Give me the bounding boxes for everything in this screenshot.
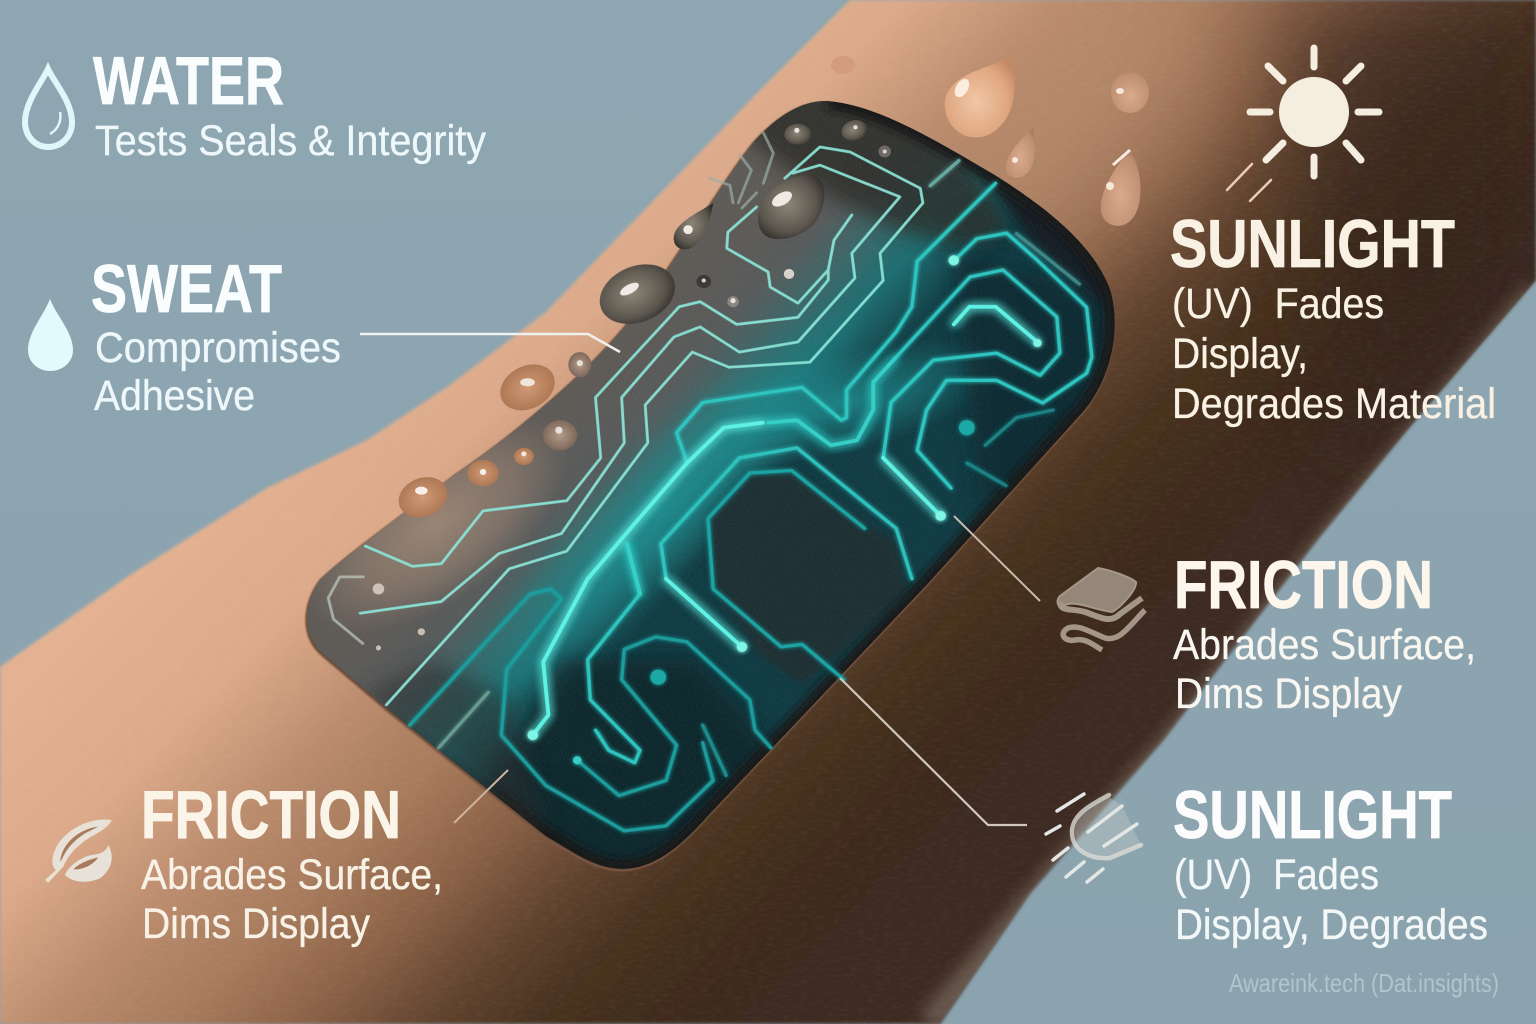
circuit nodes xyxy=(528,255,1042,764)
heading: friction right: FRICTION xyxy=(1174,547,1433,623)
text: friction right description: Abrades Surface, xyxy=(1173,621,1476,669)
text: friction left description xyxy=(141,851,443,948)
icon: friction leaves xyxy=(45,819,112,883)
heading: sunlight bottom: SUNLIGHT xyxy=(1173,777,1452,853)
text: sweat description: Compromises xyxy=(95,324,341,372)
heading: sweat: SWEAT xyxy=(91,251,282,327)
leader line: friction left xyxy=(454,770,508,823)
text: sunlight top description: Display, xyxy=(1172,330,1308,378)
text: sunlight top description xyxy=(1172,280,1496,428)
droplets on patch xyxy=(373,117,891,650)
text: friction left description: Dims Display xyxy=(142,900,370,948)
text: sunlight top description: (UV) Fades xyxy=(1172,280,1384,328)
icon: sweat drop xyxy=(28,299,73,371)
droplet: large on patch xyxy=(758,175,824,239)
droplets on skin xyxy=(831,56,1149,226)
text: friction left description: Abrades Surface, xyxy=(141,851,443,899)
leader line: friction right xyxy=(954,516,1040,601)
icon: friction layers xyxy=(1057,568,1145,650)
circuit traces: teal mid lines xyxy=(410,161,1092,831)
leader line: sunlight bottom xyxy=(840,678,1027,825)
icon: water drop outline xyxy=(25,69,72,147)
text: sweat description: Adhesive xyxy=(94,372,255,420)
heading: sunlight top: SUNLIGHT xyxy=(1170,206,1455,282)
text: sweat description xyxy=(94,324,341,420)
text: friction right description: Dims Display xyxy=(1175,670,1402,718)
icon: faded sun xyxy=(1046,794,1141,882)
text: sunlight bottom description: Display, Degrades xyxy=(1175,901,1488,949)
wearable patch xyxy=(304,100,1115,872)
heading: friction left: FRICTION xyxy=(141,777,401,853)
icon: sun xyxy=(1227,48,1379,201)
text: friction right description xyxy=(1173,621,1476,718)
text: sunlight bottom description: (UV) Fades xyxy=(1174,851,1379,899)
text: sunlight bottom description xyxy=(1174,851,1488,949)
text: water description: Tests Seals & Integrity xyxy=(95,117,486,165)
heading: water: WATER xyxy=(93,43,284,119)
text: sunlight top description: Degrades Material xyxy=(1172,380,1496,428)
leader line: sweat xyxy=(360,334,620,352)
circuit traces: bright glowing lines xyxy=(533,307,1037,735)
circuit traces: pale upper lines xyxy=(328,133,923,705)
